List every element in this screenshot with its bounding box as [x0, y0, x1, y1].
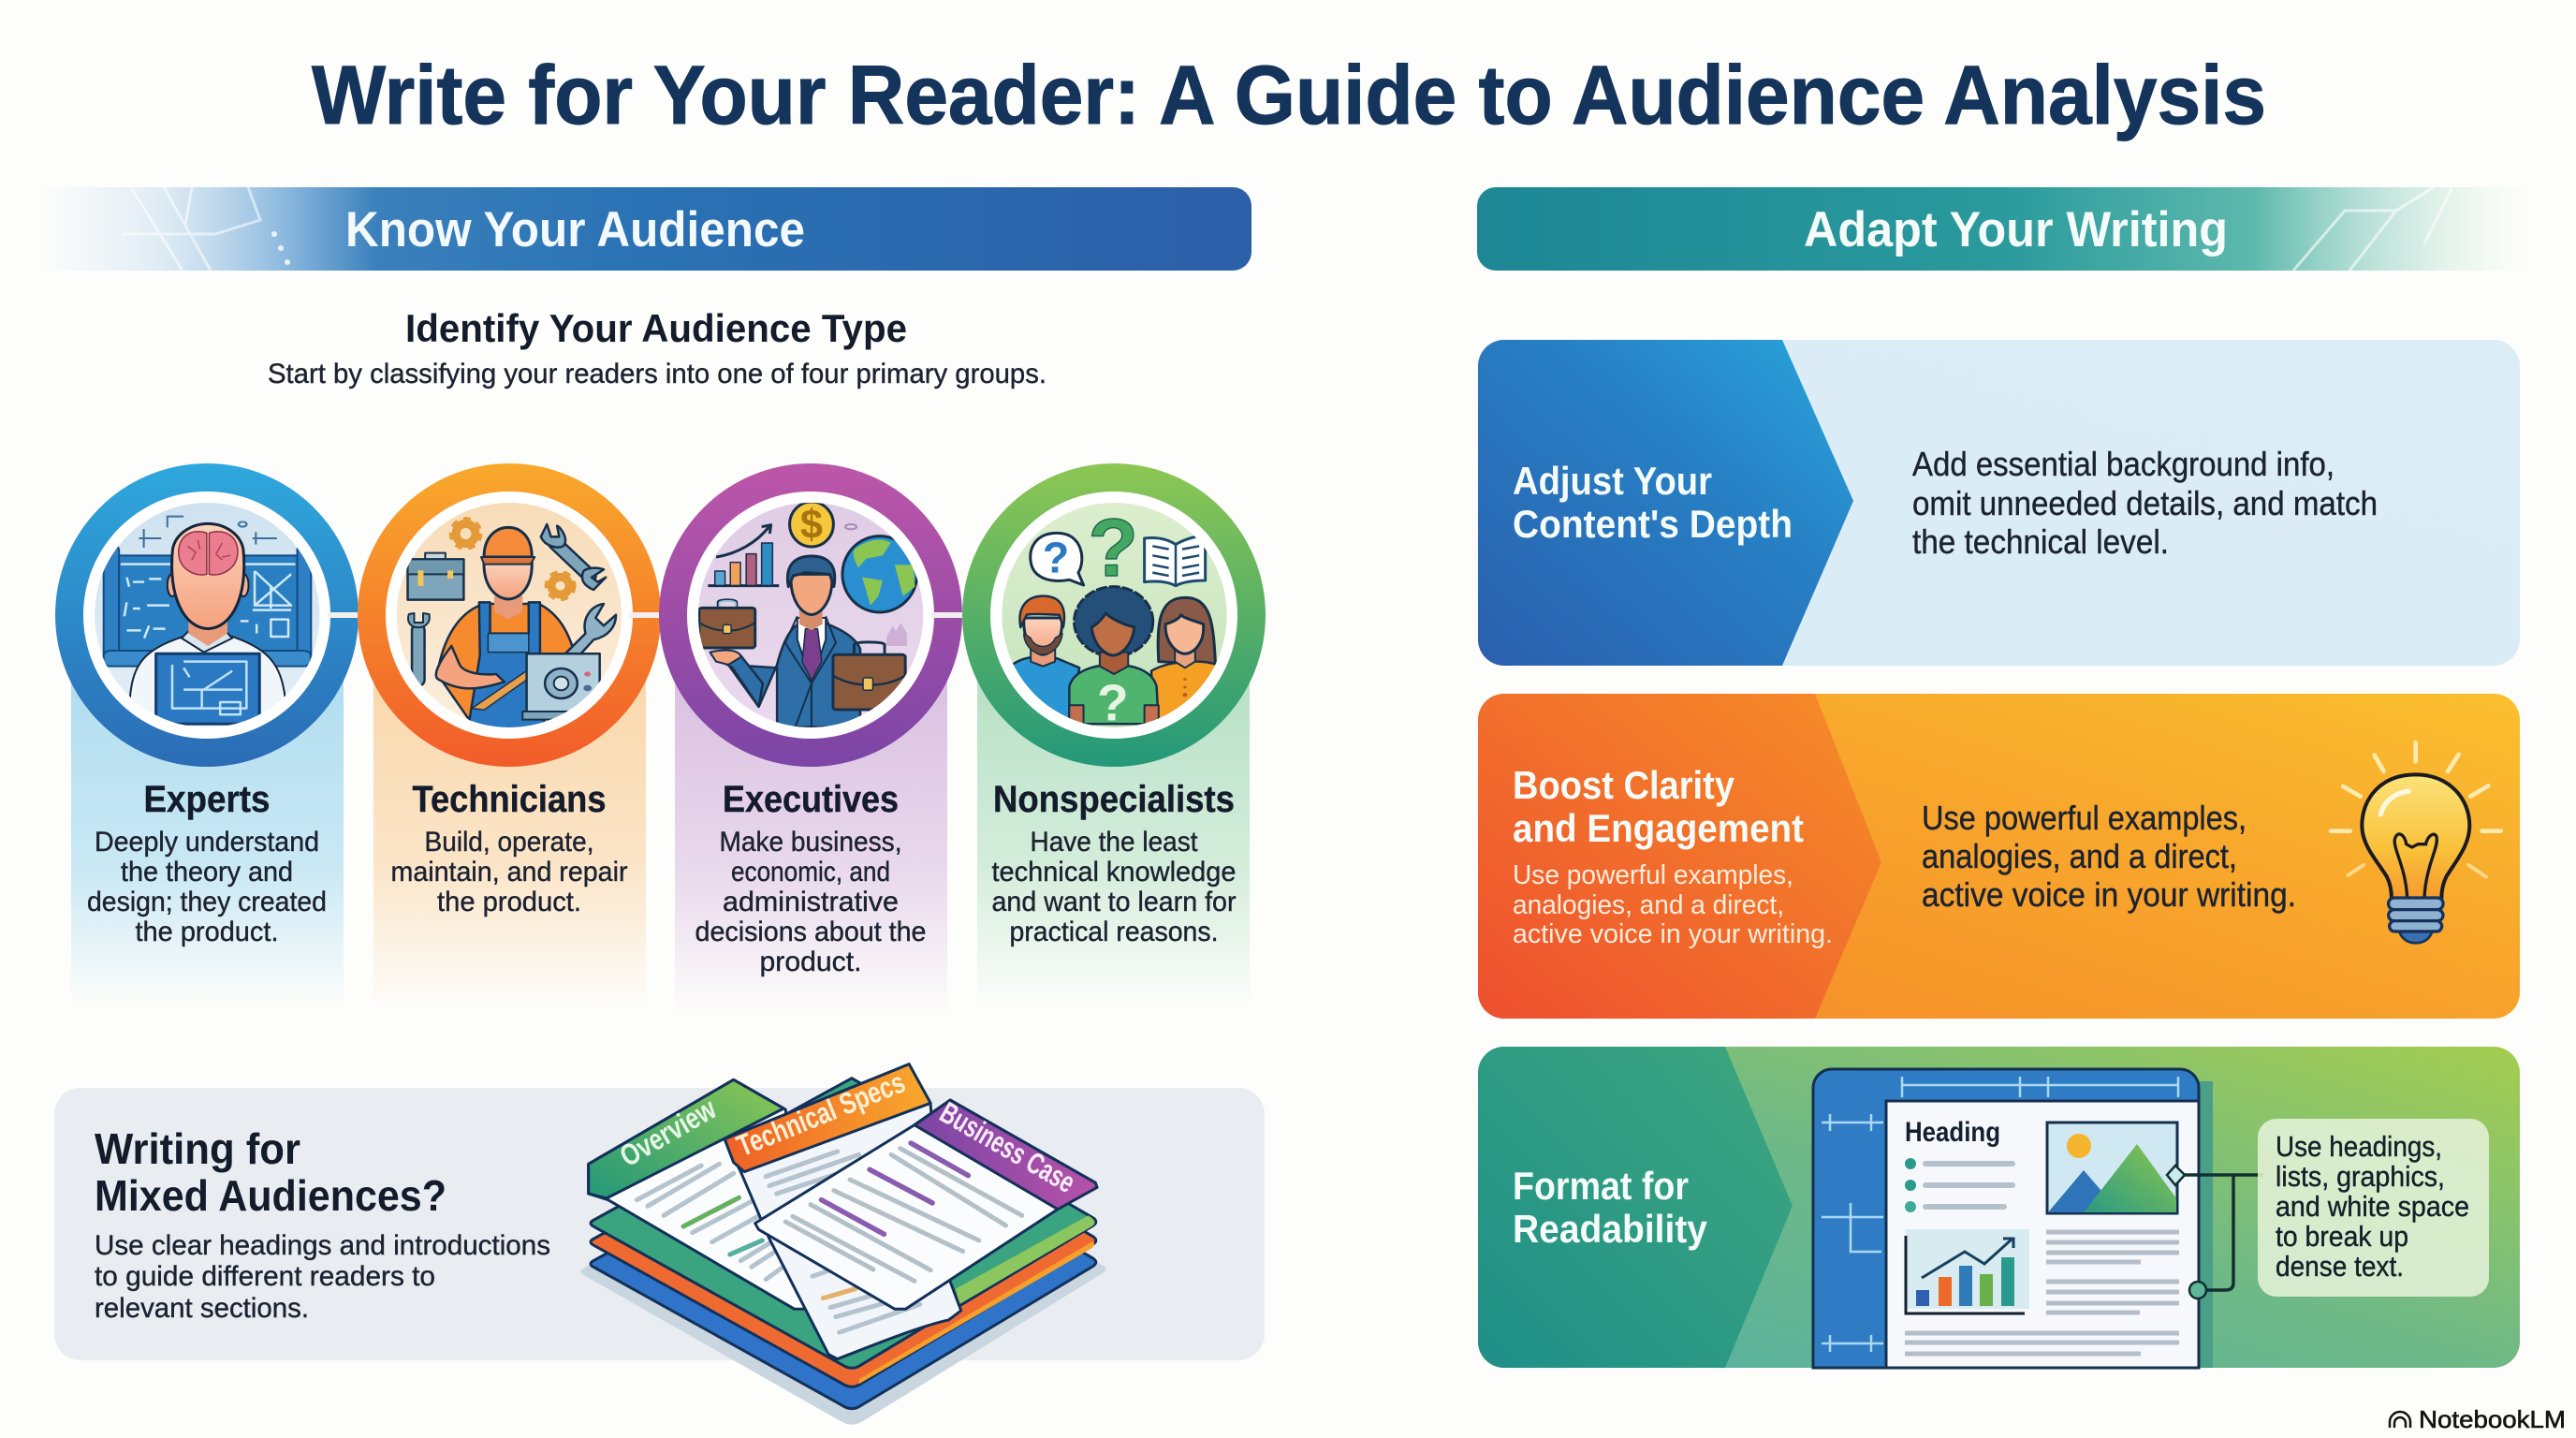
connector lines [2167, 1166, 2263, 1299]
icon: experts circle [55, 463, 359, 767]
panel: technicians [373, 655, 646, 1006]
subheading: identify your audience type: Identify Your Audience Type [405, 306, 907, 350]
text: clarity guidance: analogies, and a direct, [1922, 837, 2237, 875]
heading: nonspecialists: Nonspecialists [993, 779, 1235, 820]
panel: adjust your content's depth [1478, 340, 2520, 666]
panel: mixed audiences [54, 1088, 1265, 1360]
intro text: Start by classifying your readers into one of four primary groups. [268, 359, 1046, 389]
text: mixed audiences guidance: Use clear headings and introductions [95, 1230, 550, 1261]
heading: format for readability [1513, 1164, 1708, 1251]
callout: format guidance: and white space [2276, 1190, 2469, 1223]
panel: format for readability [1478, 1047, 2520, 1368]
banner: adapt your writing: Adapt Your Writing [1804, 202, 2228, 257]
heading: boost clarity and engagement [1513, 763, 1804, 850]
text: clarity guidance: active voice in your writing. [1922, 875, 2296, 914]
text: clarity guidance: Use powerful examples, [1922, 799, 2247, 837]
text: experts description: the theory and [121, 857, 293, 888]
text: technicians description: Build, operate, [425, 827, 593, 858]
title: Write for Your Reader: A Guide to Audience Analysis [312, 48, 2266, 141]
icon: nonspecialists circle: ? [1097, 673, 1129, 731]
icon: technicians circle [358, 463, 661, 767]
connector [328, 612, 402, 618]
tab label: business case: Business Case [934, 1095, 1081, 1199]
text: experts description: Deeply understand [95, 827, 319, 858]
panel: experts [71, 655, 344, 1006]
callout: format guidance: dense text. [2276, 1250, 2404, 1283]
text: chevron description: active voice in your writing. [1513, 919, 1833, 949]
banner: adapt your writing [1477, 187, 2527, 271]
text: mixed audiences guidance: relevant sections. [95, 1293, 309, 1324]
text: clarity guidance [1922, 799, 2296, 914]
text: mixed audiences guidance [95, 1230, 550, 1324]
heading: format for readability: Readability [1513, 1207, 1708, 1251]
icon: executives circle [659, 463, 962, 767]
text: nonspecialists description: Have the least [1030, 827, 1198, 858]
heading: boost clarity and engagement: and Engagement [1513, 806, 1804, 850]
heading: boost clarity and engagement: Boost Clarity [1513, 763, 1735, 807]
illustration: document page [1813, 1069, 2263, 1368]
panel: boost clarity and engagement [1478, 694, 2520, 1019]
heading: adjust your content's depth: Content's Depth [1513, 502, 1793, 546]
heading: adjust your content's depth [1513, 459, 1793, 546]
heading: format for readability: Format for [1513, 1164, 1689, 1208]
callout: format guidance [2258, 1119, 2489, 1297]
text: nonspecialists description [992, 827, 1236, 947]
icon: stacked documents [580, 1064, 1106, 1425]
text: heading sample: Heading [1905, 1117, 2000, 1148]
connector [629, 612, 704, 618]
icon: nonspecialists circle: ? [1089, 502, 1138, 594]
chart: bar chart [1906, 1229, 2029, 1313]
text: depth guidance [1912, 445, 2378, 561]
text: experts description: design; they created [87, 887, 327, 917]
text: technicians description: maintain, and repair [391, 857, 628, 888]
heading: technicians: Technicians [412, 779, 607, 820]
tab label: overview: Overview [614, 1092, 722, 1173]
text: technicians description: the product. [437, 887, 581, 917]
text: experts description: the product. [135, 917, 279, 947]
text: executives description: administrative [723, 887, 899, 917]
text: mixed audiences guidance: to guide different readers to [95, 1261, 435, 1292]
tab label: technical specs: Technical Specs [732, 1065, 910, 1163]
icon: nonspecialists circle: ? [1043, 534, 1069, 582]
callout: format guidance: lists, graphics, [2276, 1160, 2445, 1193]
text: executives description: Make business, [719, 827, 902, 858]
connector [931, 612, 1006, 618]
heading: executives: Executives [723, 779, 899, 820]
text: experts description [87, 827, 327, 947]
text: executives description: economic, and [731, 857, 890, 888]
text: executives description [695, 827, 927, 977]
icon: image placeholder [2047, 1123, 2177, 1213]
icon: nonspecialists circle [962, 463, 1266, 767]
heading: mixed audiences: Writing for [95, 1124, 300, 1173]
notebooklm watermark: NotebookLM [2419, 1405, 2566, 1433]
banner: know your audience [37, 187, 1251, 271]
icon: light bulb [2331, 742, 2501, 943]
heading: mixed audiences: Mixed Audiences? [95, 1171, 446, 1220]
text: depth guidance: Add essential background info, [1912, 445, 2334, 483]
text: nonspecialists description: technical knowledge [992, 857, 1236, 888]
text: chevron description [1513, 860, 1833, 949]
banner: know your audience: Know Your Audience [345, 202, 805, 257]
text: executives description: product. [760, 946, 861, 977]
heading: mixed audiences [95, 1124, 446, 1220]
callout: format guidance: Use headings, [2276, 1130, 2442, 1163]
callout: format guidance: to break up [2276, 1220, 2408, 1253]
heading: adjust your content's depth: Adjust Your [1513, 459, 1712, 503]
text: chevron description: Use powerful examples, [1513, 860, 1793, 890]
icon: executives circle: $ [800, 503, 823, 548]
text: depth guidance: omit unneeded details, and match [1912, 484, 2378, 522]
text: depth guidance: the technical level. [1912, 522, 2169, 561]
text: technicians description [391, 827, 628, 917]
text: executives description: decisions about the [695, 917, 927, 947]
panel: executives [675, 655, 947, 1016]
text: nonspecialists description: and want to learn for [992, 887, 1236, 917]
panel: nonspecialists [977, 655, 1250, 1006]
text: chevron description: analogies, and a direct, [1513, 890, 1784, 920]
heading: experts: Experts [144, 779, 270, 820]
text: nonspecialists description: practical reasons. [1009, 917, 1219, 947]
